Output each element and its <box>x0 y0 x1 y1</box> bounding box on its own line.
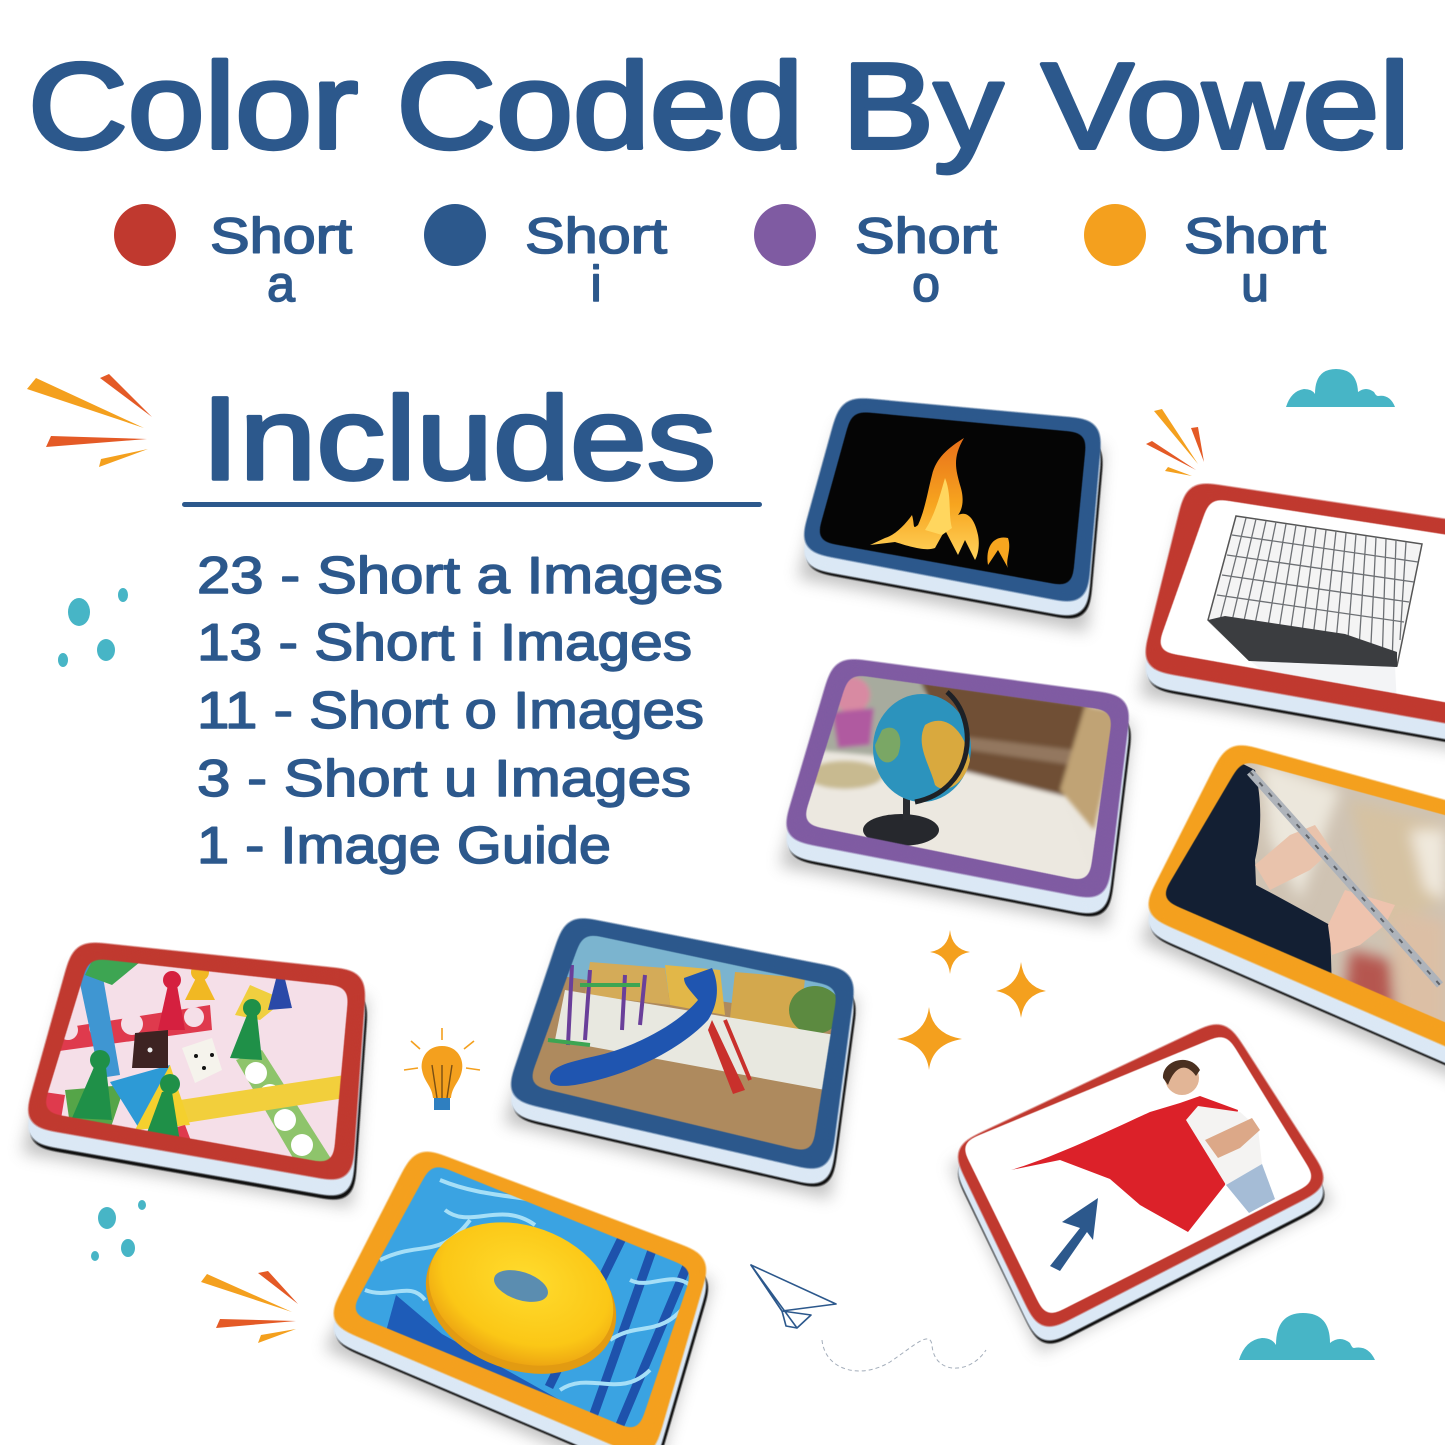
legend <box>114 204 1326 312</box>
legend: short u <box>1084 204 1326 312</box>
decoration: burst top left <box>27 374 152 467</box>
includes list: 1 - Image Guide <box>197 817 611 875</box>
includes list: 11 - Short o Images <box>197 682 704 740</box>
decoration: burst bottom left <box>201 1271 298 1343</box>
icon: cloud top <box>1286 369 1395 407</box>
card: playground <box>504 914 859 1199</box>
decoration: burst near cage <box>1146 409 1204 476</box>
icon: paper plane <box>751 1265 836 1328</box>
legend: short a: Short <box>210 208 352 264</box>
plane dashed trail <box>822 1339 986 1371</box>
includes list: 23 - Short a Images <box>197 547 723 605</box>
includes list: 13 - Short i Images <box>197 614 692 672</box>
card: fire <box>790 390 1110 632</box>
card: cage <box>1140 480 1445 757</box>
includes list <box>197 547 723 875</box>
legend: short i: i <box>590 256 602 312</box>
card: cape <box>950 1017 1334 1353</box>
card: globe <box>780 656 1134 927</box>
legend: short a: a <box>267 256 295 312</box>
includes list: 3 - Short u Images <box>197 750 691 808</box>
icon: light bulb <box>404 1028 480 1110</box>
heading underline <box>182 502 762 507</box>
decoration: dots lower <box>91 1200 146 1261</box>
icon: sparkles <box>897 930 1046 1070</box>
legend: short o <box>754 204 997 312</box>
card: swim ring <box>325 1145 714 1445</box>
legend: short i: Short <box>525 208 667 264</box>
decoration: dots upper <box>58 588 128 667</box>
card: ludo game <box>20 940 369 1207</box>
card: flute <box>1140 740 1445 1098</box>
legend: short u: u <box>1241 256 1269 312</box>
legend: short o: o <box>912 256 940 312</box>
legend: short i <box>424 204 667 312</box>
legend: short u: Short <box>1184 208 1326 264</box>
icon: cloud bottom <box>1239 1313 1375 1360</box>
icon: up arrow <box>1050 1198 1098 1271</box>
title: Color Coded By Vowel <box>28 38 1410 174</box>
heading: includes: Includes <box>201 373 716 505</box>
legend: short a <box>114 204 352 312</box>
legend: short o: Short <box>855 208 997 264</box>
